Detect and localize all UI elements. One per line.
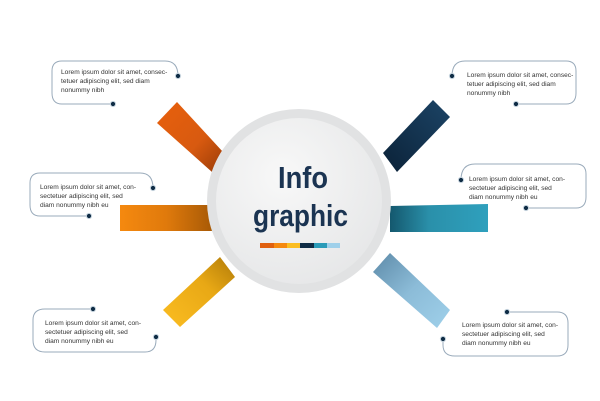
ribbon: top-left orange [157,102,223,172]
callout: top-left: nonummy nibh [61,87,105,94]
callout: middle-right: Lorem ipsum dolor sit amet, con- [469,176,565,183]
callout: middle-left: Lorem ipsum dolor sit amet, con- [40,184,136,191]
callout: middle-left: diam nonummy nibh eu [40,202,109,209]
callout: bottom-left [33,306,159,352]
color bar [260,243,340,248]
callout: bottom-left: diam nonummy nibh eu [45,338,114,345]
callout: top-left: tetuer adipiscing elit, sed diam [61,78,150,85]
callout: top-right: nonummy nibh [467,90,511,97]
callout: bottom-right: Lorem ipsum dolor sit amet, con- [462,322,558,329]
callout: middle-right: sectetuer adipiscing elit, sed [469,185,552,192]
callout: middle-left: sectetuer adipiscing elit, sed [40,193,123,200]
callout: bottom-right: sectetuer adipiscing elit, sed [462,331,545,338]
callout: bottom-left: Lorem ipsum dolor sit amet, con- [45,320,141,327]
callout: top-right: tetuer adipiscing elit, sed diam [467,81,556,88]
title: Info [278,160,328,195]
callout: bottom-left: sectetuer adipiscing elit, sed [45,329,128,336]
ribbon: bottom-right light blue [373,253,450,328]
ribbon: top-right navy [383,100,450,172]
ribbon: middle-left orange [120,205,212,231]
ribbon: middle-right teal [390,204,488,232]
callout: bottom-right: diam nonummy nibh eu [462,340,531,347]
central circle [207,109,391,293]
callout: middle-left [30,173,156,219]
callout: middle-right [458,164,586,211]
callout: middle-right: diam nonummy nibh eu [469,194,538,201]
callout: bottom-right [440,309,568,356]
callout: top-right [449,61,576,107]
callout: top-right: Lorem ipsum dolor sit amet, consec- [467,72,573,79]
ribbon: bottom-left yellow [163,257,235,327]
callout: top-left [52,61,181,107]
central circle: graphic [253,198,348,233]
callout: top-left: Lorem ipsum dolor sit amet, consec- [61,69,167,76]
